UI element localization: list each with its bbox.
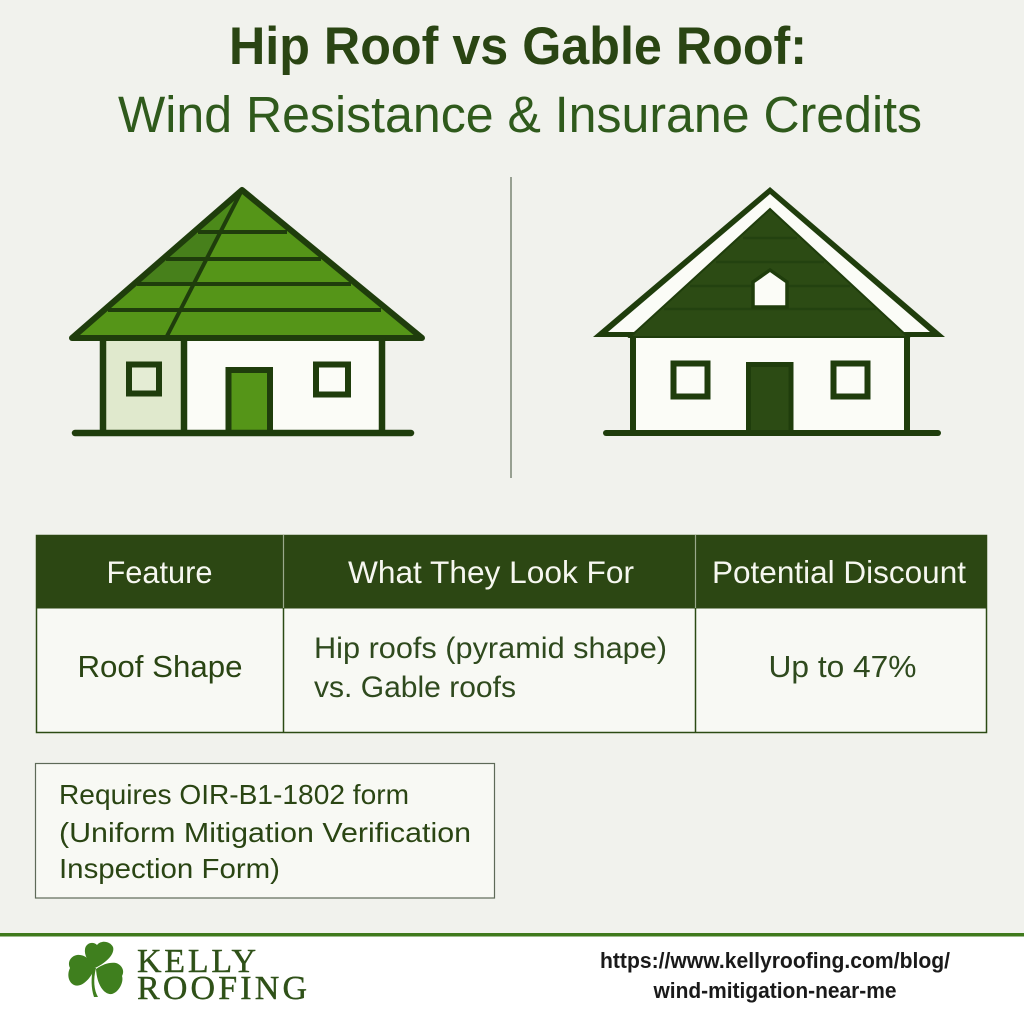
icon: hip roof house <box>72 190 422 433</box>
table header: What They Look For <box>348 554 634 590</box>
callout: form requirement <box>36 764 494 898</box>
table header: Feature <box>106 554 212 590</box>
title: Wind Resistance & Insurane Credits <box>118 86 922 143</box>
icon: gable roof house <box>593 187 945 433</box>
logo wordmark: ROOFING <box>137 970 307 1007</box>
table header <box>36 535 987 608</box>
source url <box>600 948 951 1003</box>
table row: roof shape: Roof Shape <box>78 649 242 684</box>
table <box>36 535 987 733</box>
title: Hip Roof vs Gable Roof: <box>229 17 807 76</box>
table row: roof shape <box>78 632 916 704</box>
footer <box>0 933 1024 1024</box>
table row: roof shape: Up to 47% <box>768 649 916 684</box>
logo wordmark <box>137 943 307 1007</box>
logo wordmark: KELLY <box>137 943 256 980</box>
table row: roof shape: vs. Gable roofs <box>314 671 516 704</box>
source url: wind-mitigation-near-me <box>653 978 896 1003</box>
table row: roof shape: Hip roofs (pyramid shape) <box>314 632 667 665</box>
source url: https://www.kellyroofing.com/blog/ <box>600 948 951 973</box>
title <box>118 17 922 143</box>
icon: shamrock logo <box>68 942 123 997</box>
callout: form requirement: (Uniform Mitigation Verification <box>59 817 471 848</box>
callout: form requirement: Requires OIR-B1-1802 form <box>59 779 409 810</box>
callout: form requirement: Inspection Form) <box>59 853 280 884</box>
table header: Potential Discount <box>712 554 966 590</box>
